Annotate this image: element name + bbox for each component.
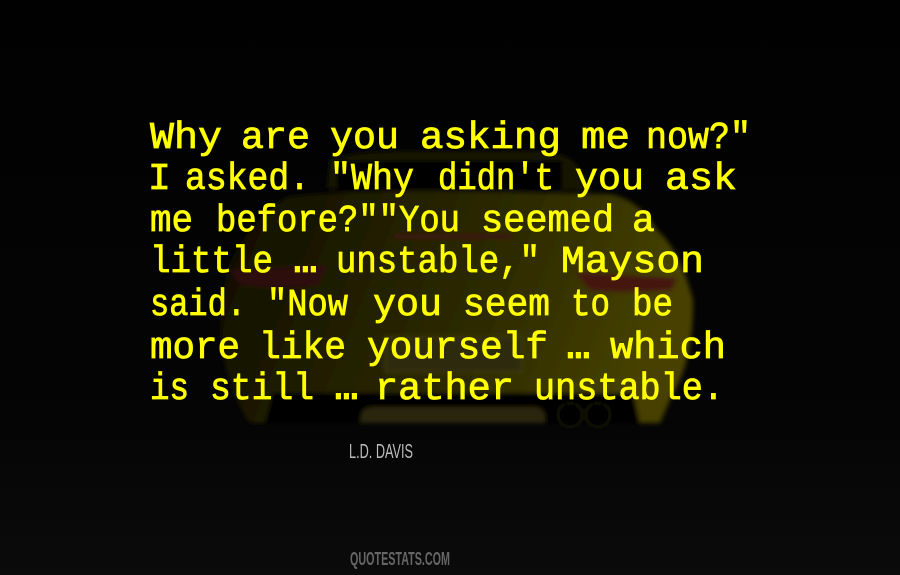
quote line 1 bbox=[150, 117, 751, 160]
rear window bbox=[337, 161, 562, 191]
quote line 4: ... bbox=[286, 241, 316, 284]
car roof and spoiler bbox=[327, 151, 592, 190]
quote line 1: asking bbox=[420, 117, 561, 160]
quote line 2: I bbox=[148, 158, 171, 201]
quote line 3: a bbox=[632, 200, 655, 243]
quote line 3: me bbox=[150, 200, 193, 243]
lower black bumper bbox=[265, 393, 640, 423]
quote line 6 bbox=[150, 327, 726, 370]
exhaust pipes bbox=[558, 403, 582, 427]
quote line 6: like bbox=[259, 327, 346, 370]
quote line 5: said. bbox=[150, 284, 246, 327]
quote line 5: seem bbox=[463, 284, 550, 327]
quote line 3 bbox=[150, 200, 655, 243]
quote line 7: ... bbox=[327, 368, 357, 411]
quote line 4 bbox=[150, 241, 704, 284]
quote line 6: which bbox=[610, 327, 726, 370]
quote line 1: me bbox=[581, 117, 630, 160]
quote line 1: are bbox=[241, 117, 310, 160]
quote line 1: now?" bbox=[646, 117, 751, 160]
quote line 1: Why bbox=[150, 117, 222, 160]
quote text bbox=[148, 117, 751, 411]
licence plate bbox=[385, 337, 522, 372]
quote line 2: asked. bbox=[185, 158, 310, 201]
quote line 7 bbox=[150, 368, 724, 411]
quote line 7: unstable. bbox=[534, 368, 724, 411]
quote line 2: didn't bbox=[438, 158, 554, 201]
quote line 4: Mayson bbox=[561, 241, 704, 284]
quote line 1: you bbox=[330, 117, 399, 160]
quote line 2: "Why bbox=[330, 158, 414, 201]
site watermark: QUOTESTATS.COM bbox=[350, 549, 450, 569]
quote line 7: rather bbox=[375, 368, 514, 411]
quote line 5: to bbox=[571, 284, 610, 327]
diffuser panel bbox=[360, 407, 545, 423]
brake light bbox=[393, 234, 513, 239]
quote line 5: you bbox=[373, 284, 442, 327]
quote line 6: yourself bbox=[367, 327, 548, 370]
quote line 3: before?""You bbox=[216, 200, 460, 243]
car body bbox=[221, 191, 693, 423]
quote line 7: still bbox=[210, 368, 314, 411]
quote line 7: is bbox=[150, 368, 189, 411]
author name: L.D. DAVIS bbox=[349, 441, 413, 463]
right tail light bbox=[575, 272, 677, 292]
quote line 5: be bbox=[632, 284, 673, 327]
quote line 6: more bbox=[150, 327, 240, 370]
car photo backdrop bbox=[221, 151, 693, 427]
left tail light bbox=[230, 265, 327, 287]
quote line 2: ask bbox=[665, 158, 737, 201]
quote line 2: you bbox=[575, 158, 644, 201]
quote line 5 bbox=[150, 284, 673, 327]
quote line 4: little bbox=[150, 241, 273, 284]
quote line 4: unstable," bbox=[336, 241, 540, 284]
quote line 3: seemed bbox=[481, 200, 614, 243]
quote line 6: ... bbox=[559, 327, 589, 370]
quote line 5: "Now bbox=[267, 284, 348, 327]
quote line 2 bbox=[148, 158, 737, 201]
